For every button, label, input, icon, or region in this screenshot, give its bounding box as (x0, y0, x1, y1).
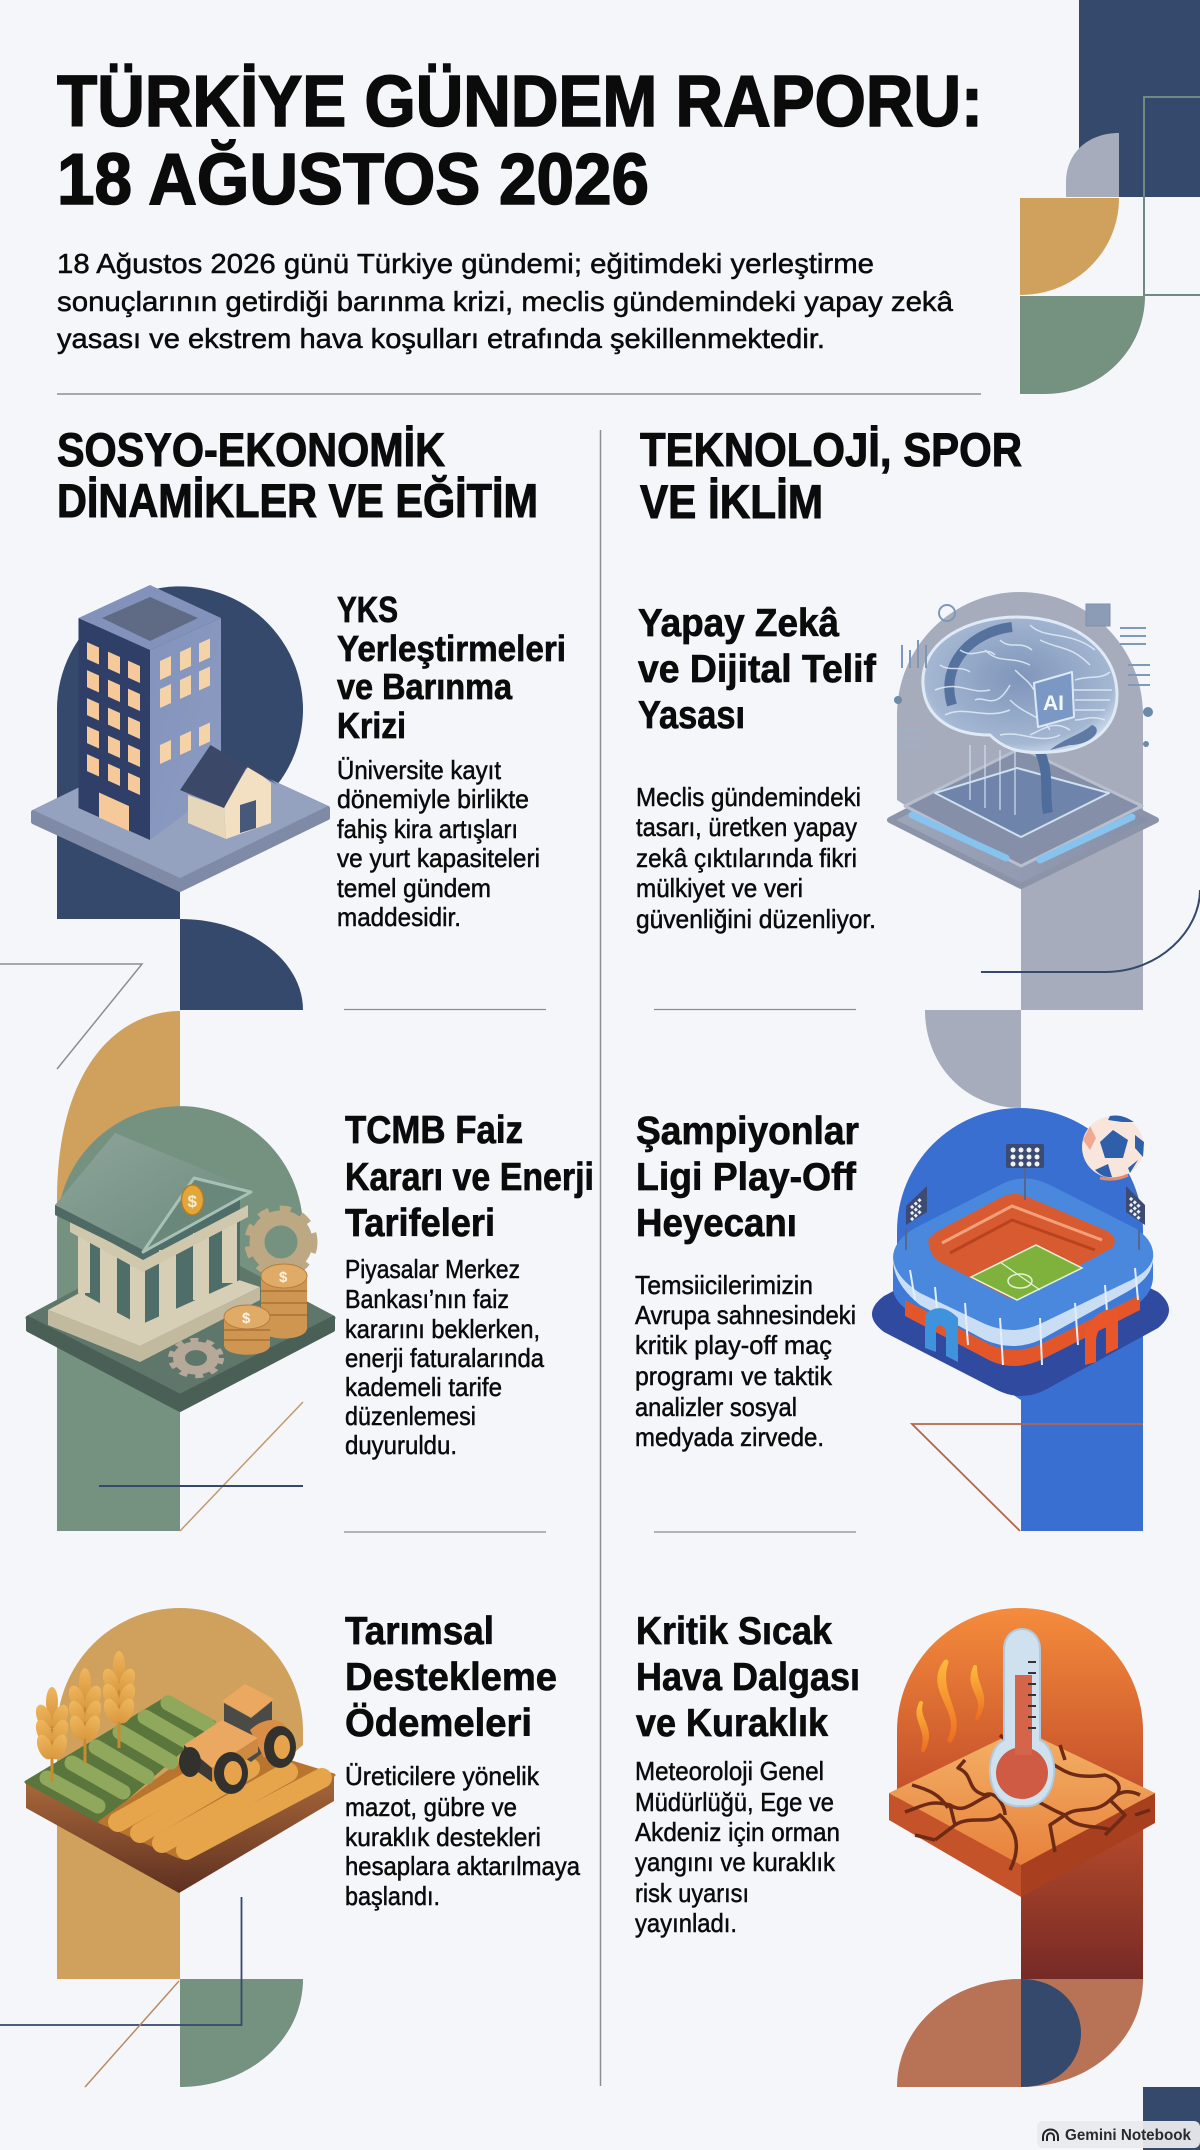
icon: farm field with tractor and wheat (26, 1651, 334, 1893)
text: TCMB Faiz Kararı ve Enerji Tarifeleri: düzenlemesi (345, 1401, 476, 1431)
icon: central bank with coins and gears (28, 1133, 333, 1410)
text: Yapay Zekâ ve Dijital Telif Yasası: güvenliğini düzenliyor. (636, 904, 876, 934)
text: YKS Yerleştirmeleri ve Barınma Krizi: ve Barınma (337, 666, 513, 707)
text: YKS Yerleştirmeleri ve Barınma Krizi (337, 589, 566, 932)
title: 18 AĞUSTOS 2026 (57, 140, 649, 220)
text: Tarımsal Destekleme Ödemeleri (345, 1610, 580, 1911)
text: Yapay Zekâ ve Dijital Telif Yasası: Yapay Zekâ (638, 602, 839, 645)
intro paragraph: 18 Ağustos 2026 günü Türkiye gündemi; eğitimdeki yerleştirme (57, 248, 874, 279)
badge: Gemini Notebook (1037, 2121, 1200, 2148)
text: TCMB Faiz Kararı ve Enerji Tarifeleri: Bankası’nın faiz (345, 1284, 509, 1314)
text: YKS Yerleştirmeleri ve Barınma Krizi: ve yurt kapasiteleri (337, 843, 540, 873)
text: Yapay Zekâ ve Dijital Telif Yasası: zekâ çıktılarında fikri (636, 843, 857, 873)
icon: stadium with football (872, 1115, 1169, 1396)
text: Kritik Sıcak Hava Dalgası ve Kuraklık: yayınladı. (635, 1908, 737, 1938)
section heading: right (640, 423, 1022, 528)
decorative shapes: right column (897, 592, 1200, 2150)
text: Şampiyonlar Ligi Play-Off Heyecanı: kritik play-off maç (635, 1330, 832, 1360)
text: Tarımsal Destekleme Ödemeleri: Üreticilere yönelik (345, 1761, 540, 1791)
section heading: right: VE İKLİM (640, 475, 823, 528)
icon: central bank with coins and gears: $ (279, 1269, 288, 1286)
icon: central bank with coins and gears: $ (242, 1310, 251, 1327)
text: Yapay Zekâ ve Dijital Telif Yasası: mülkiyet ve veri (636, 873, 803, 903)
text: Kritik Sıcak Hava Dalgası ve Kuraklık (635, 1610, 860, 1938)
icon: brain on AI platform: AI (1043, 692, 1064, 715)
text: Şampiyonlar Ligi Play-Off Heyecanı: programı ve taktik (635, 1361, 833, 1391)
text: TCMB Faiz Kararı ve Enerji Tarifeleri: duyuruldu. (345, 1430, 457, 1460)
text: YKS Yerleştirmeleri ve Barınma Krizi: Yerleştirmeleri (337, 628, 566, 669)
decorative shapes: left column (0, 586, 303, 2087)
text: Şampiyonlar Ligi Play-Off Heyecanı (635, 1110, 859, 1452)
intro paragraph: yasası ve ekstrem hava koşulları etrafında şekillenmektedir. (57, 323, 825, 354)
text: Yapay Zekâ ve Dijital Telif Yasası: ve Dijital Telif (638, 648, 877, 691)
text: Kritik Sıcak Hava Dalgası ve Kuraklık: Akdeniz için orman (635, 1817, 840, 1847)
text: YKS Yerleştirmeleri ve Barınma Krizi: YKS (337, 589, 398, 630)
icon: apartment building and house (33, 585, 328, 890)
title: TÜRKİYE GÜNDEM RAPORU: (57, 62, 983, 142)
text: Şampiyonlar Ligi Play-Off Heyecanı: Avrupa sahnesindeki (635, 1300, 856, 1330)
text: Tarımsal Destekleme Ödemeleri: kuraklık destekleri (345, 1822, 541, 1852)
badge: Gemini Notebook: Gemini Notebook (1065, 2127, 1191, 2144)
text: YKS Yerleştirmeleri ve Barınma Krizi: Krizi (337, 705, 406, 746)
text: Kritik Sıcak Hava Dalgası ve Kuraklık: Kritik Sıcak (636, 1610, 832, 1653)
text: Tarımsal Destekleme Ödemeleri: başlandı. (345, 1881, 440, 1911)
text: TCMB Faiz Kararı ve Enerji Tarifeleri: Piyasalar Merkez (345, 1254, 520, 1284)
text: Yapay Zekâ ve Dijital Telif Yasası (636, 602, 877, 934)
text: TCMB Faiz Kararı ve Enerji Tarifeleri: Tarifeleri (345, 1202, 495, 1245)
text: Kritik Sıcak Hava Dalgası ve Kuraklık: yangını ve kuraklık (635, 1847, 836, 1877)
text: Şampiyonlar Ligi Play-Off Heyecanı: Heyecanı (636, 1202, 797, 1245)
text: Tarımsal Destekleme Ödemeleri: Tarımsal (345, 1610, 494, 1653)
intro paragraph: sonuçlarının getirdiği barınma krizi, meclis gündemindeki yapay zekâ (57, 286, 953, 317)
text: Şampiyonlar Ligi Play-Off Heyecanı: Temsiicilerimizin (635, 1270, 813, 1300)
decorative shapes: top right (1020, 0, 1200, 394)
section heading: right: TEKNOLOJİ, SPOR (640, 423, 1022, 476)
text: Tarımsal Destekleme Ödemeleri: Ödemeleri (345, 1702, 532, 1745)
text: YKS Yerleştirmeleri ve Barınma Krizi: Üniversite kayıt (337, 755, 502, 785)
text: Kritik Sıcak Hava Dalgası ve Kuraklık: Hava Dalgası (636, 1656, 860, 1699)
intro paragraph (57, 248, 953, 354)
title (57, 62, 983, 220)
icon: central bank with coins and gears: $ (188, 1192, 198, 1211)
text: Kritik Sıcak Hava Dalgası ve Kuraklık: ve Kuraklık (636, 1702, 828, 1745)
text: TCMB Faiz Kararı ve Enerji Tarifeleri: TCMB Faiz (345, 1109, 523, 1152)
text: YKS Yerleştirmeleri ve Barınma Krizi: temel gündem (337, 873, 491, 903)
text: Şampiyonlar Ligi Play-Off Heyecanı: analizler sosyal (635, 1392, 797, 1422)
text: Kritik Sıcak Hava Dalgası ve Kuraklık: risk uyarısı (635, 1878, 749, 1908)
text: Şampiyonlar Ligi Play-Off Heyecanı: Ligi Play-Off (636, 1156, 857, 1199)
text: TCMB Faiz Kararı ve Enerji Tarifeleri: kademeli tarife (345, 1372, 502, 1402)
section heading: left: DİNAMİKLER VE EĞİTİM (57, 474, 538, 527)
section heading: left: SOSYO-EKONOMİK (57, 423, 445, 476)
text: Yapay Zekâ ve Dijital Telif Yasası: Meclis gündemindeki (636, 782, 861, 812)
text: TCMB Faiz Kararı ve Enerji Tarifeleri: Kararı ve Enerji (345, 1156, 594, 1199)
text: TCMB Faiz Kararı ve Enerji Tarifeleri: kararını beklerken, (345, 1314, 540, 1344)
text: Şampiyonlar Ligi Play-Off Heyecanı: Şampiyonlar (636, 1110, 859, 1153)
text: TCMB Faiz Kararı ve Enerji Tarifeleri (345, 1109, 594, 1460)
text: Tarımsal Destekleme Ödemeleri: hesaplara aktarılmaya (345, 1851, 580, 1881)
text: Tarımsal Destekleme Ödemeleri: Destekleme (345, 1656, 557, 1699)
text: TCMB Faiz Kararı ve Enerji Tarifeleri: enerji faturalarında (345, 1343, 544, 1373)
text: YKS Yerleştirmeleri ve Barınma Krizi: maddesidir. (337, 902, 461, 932)
text: YKS Yerleştirmeleri ve Barınma Krizi: fahiş kira artışları (337, 814, 518, 844)
section heading: left (57, 423, 538, 527)
text: Tarımsal Destekleme Ödemeleri: mazot, gübre ve (345, 1792, 517, 1822)
text: Kritik Sıcak Hava Dalgası ve Kuraklık: Meteoroloji Genel (635, 1756, 824, 1786)
text: Yapay Zekâ ve Dijital Telif Yasası: Yasası (638, 694, 745, 737)
text: Kritik Sıcak Hava Dalgası ve Kuraklık: Müdürlüğü, Ege ve (635, 1787, 834, 1817)
text: Yapay Zekâ ve Dijital Telif Yasası: tasarı, üretken yapay (636, 812, 857, 842)
icon: brain on AI platform (890, 604, 1156, 886)
text: Şampiyonlar Ligi Play-Off Heyecanı: medyada zirvede. (635, 1422, 824, 1452)
icon: thermometer on cracked soil (889, 1629, 1155, 1897)
text: YKS Yerleştirmeleri ve Barınma Krizi: dönemiyle birlikte (337, 784, 529, 814)
